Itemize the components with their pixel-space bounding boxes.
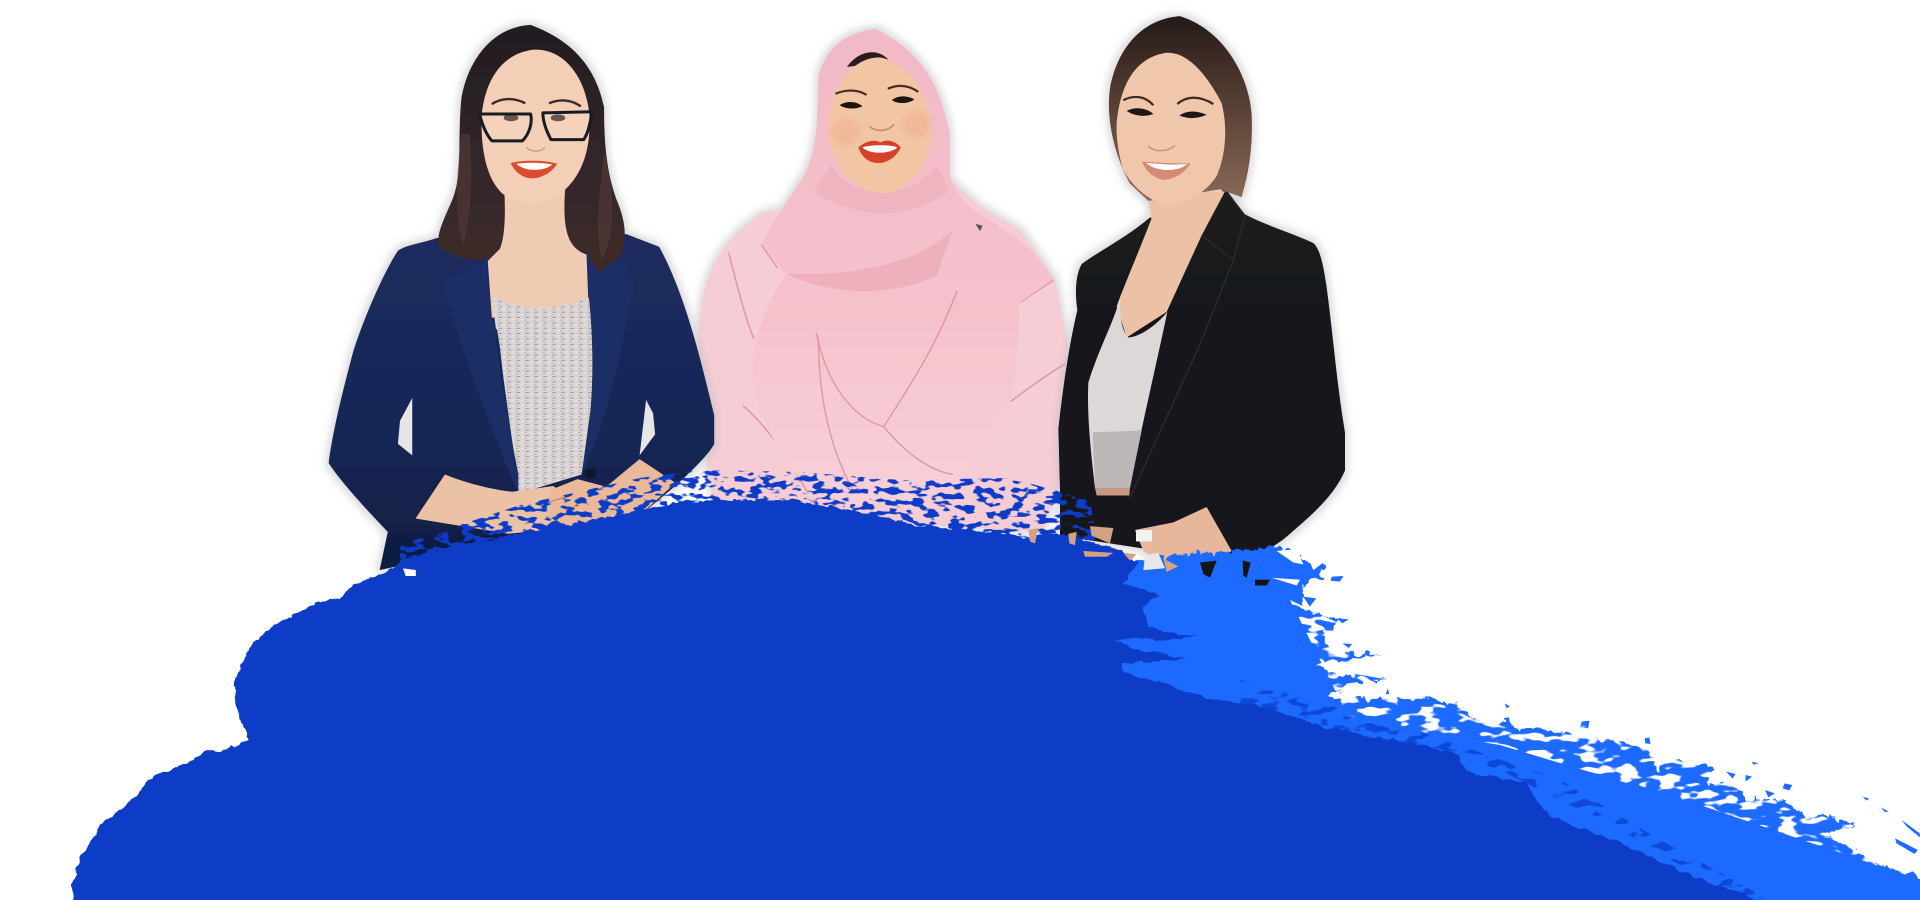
nose xyxy=(527,147,545,151)
bright blue flecks xyxy=(1303,576,1920,854)
brush stroke: bright blue xyxy=(1095,547,1920,900)
left forearm xyxy=(416,474,571,534)
eyes xyxy=(504,114,518,121)
dark underscarf xyxy=(847,52,890,67)
ribbed hem xyxy=(1093,430,1142,488)
right lapel xyxy=(582,253,635,474)
pin on scarf xyxy=(975,224,983,231)
right arm gap xyxy=(640,400,655,455)
black jacket chips xyxy=(1200,561,1270,585)
white chips near sleeve xyxy=(1272,549,1323,585)
neck and chest xyxy=(488,187,589,318)
chips showing through paint xyxy=(403,526,1323,585)
eyes xyxy=(1127,108,1207,118)
mouth xyxy=(511,161,557,178)
paint speckle above the dark stroke xyxy=(400,470,1100,600)
brows xyxy=(1123,97,1213,105)
neck scarf under chin xyxy=(814,165,949,213)
left lapel xyxy=(442,260,518,494)
brush stroke: dark blue main shape xyxy=(71,500,1765,900)
midriff shadow xyxy=(1095,488,1130,496)
white chip under blazer xyxy=(403,568,416,576)
button xyxy=(585,468,596,479)
mouth xyxy=(1142,161,1191,180)
brows xyxy=(492,99,581,106)
face xyxy=(1117,53,1225,205)
nose xyxy=(1148,145,1175,151)
finger lines xyxy=(551,496,582,517)
white ring highlight xyxy=(1143,553,1165,570)
navy blazer xyxy=(329,234,714,570)
sleeve folds xyxy=(729,253,1065,494)
eyes and brows xyxy=(836,86,918,130)
lapel edge xyxy=(1130,187,1245,497)
hijab drape xyxy=(752,29,1053,501)
arm gap xyxy=(398,398,412,455)
knit top xyxy=(492,297,593,494)
hijab fold lines xyxy=(761,245,957,494)
glasses xyxy=(480,112,592,141)
hair xyxy=(1109,16,1252,201)
right forearm and hands xyxy=(549,459,676,530)
pink dress xyxy=(698,180,1068,532)
hair highlights xyxy=(457,134,612,260)
white speckle along the bright edge xyxy=(1290,600,1920,880)
hijab fold shading xyxy=(786,230,953,291)
right part of dark shape xyxy=(887,522,1765,900)
white top xyxy=(1088,291,1167,488)
person: woman in pink hijab xyxy=(698,29,1068,532)
mouth xyxy=(858,141,901,163)
neck and chest xyxy=(1117,191,1225,337)
person: woman in black blazer xyxy=(1058,16,1345,570)
face xyxy=(481,50,590,203)
black blazer xyxy=(1058,187,1345,562)
knit neckline xyxy=(492,297,591,329)
cheeks xyxy=(831,117,859,147)
dark speckle along the dark edge xyxy=(1240,680,1770,900)
hand in pocket xyxy=(1135,507,1232,570)
skin chips xyxy=(1028,526,1178,572)
face xyxy=(828,57,932,193)
wristwatch band xyxy=(1136,530,1152,541)
left part of dark shape xyxy=(71,500,918,900)
person: woman with glasses in navy blazer xyxy=(329,25,714,570)
hair xyxy=(438,25,625,272)
